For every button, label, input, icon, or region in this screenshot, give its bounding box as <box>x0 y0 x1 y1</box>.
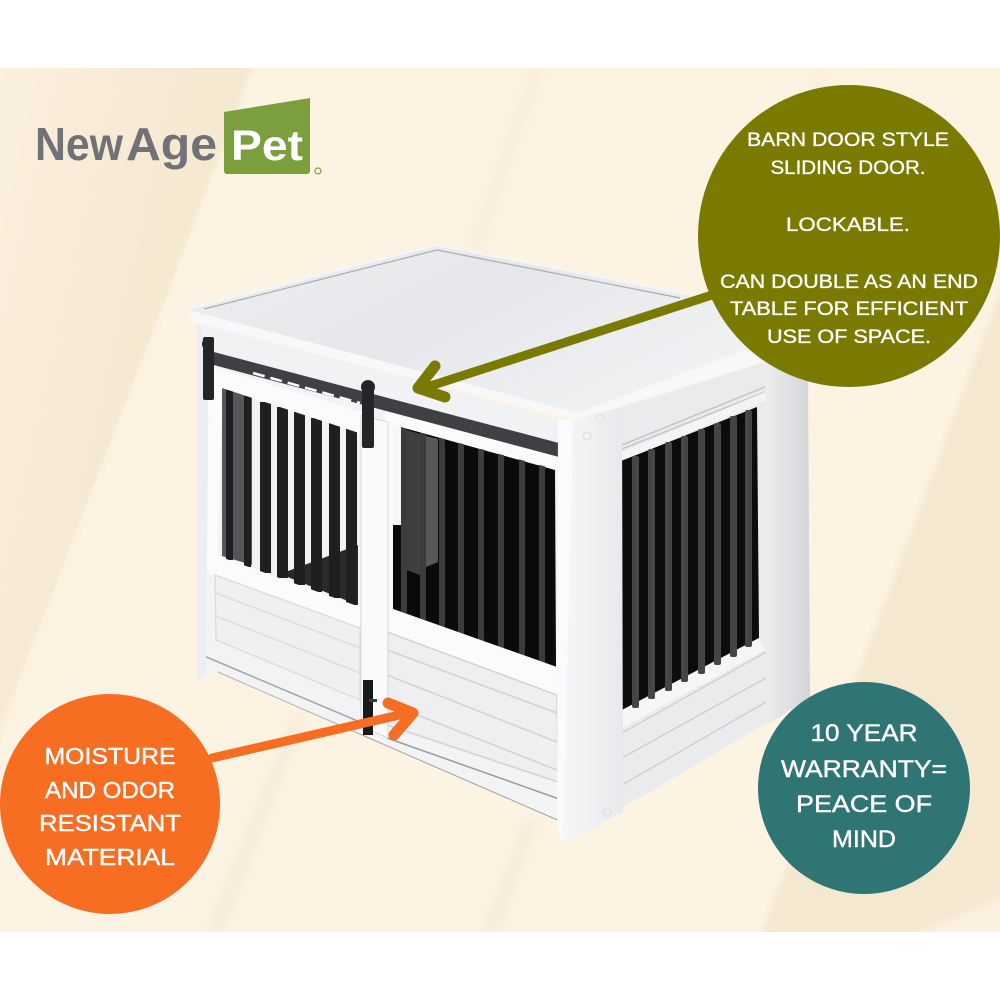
callout: barn door: LOCKABLE. <box>786 215 910 236</box>
top surface <box>188 246 755 413</box>
side lower panel grooves <box>622 652 766 785</box>
callout: moisture resistant: MOISTURE <box>44 743 176 769</box>
right lower panel <box>362 632 562 822</box>
right door mesh <box>393 427 556 668</box>
callout: barn door <box>698 85 1000 387</box>
logo: New Age Pet: New <box>35 118 123 170</box>
valance above rail <box>200 322 562 443</box>
sliding rail <box>210 351 559 457</box>
callout: barn door: BARN DOOR STYLE <box>747 130 949 151</box>
callout: warranty: 10 YEAR <box>810 720 918 747</box>
callout: barn door: CAN DOUBLE AS AN END <box>720 272 978 293</box>
back corner post <box>765 350 810 725</box>
callout: warranty: WARRANTY= <box>781 756 947 783</box>
left door frame <box>205 366 362 628</box>
callout: moisture resistant <box>0 694 220 914</box>
arrow: olive pointing to door <box>418 295 712 397</box>
callout: warranty <box>758 682 970 894</box>
callout: moisture resistant: AND ODOR <box>45 777 175 803</box>
door lock <box>363 680 377 735</box>
front corner post <box>563 407 623 843</box>
right door frame <box>385 408 558 695</box>
callout: barn door: USE OF SPACE. <box>767 327 931 348</box>
callout: barn door: SLIDING DOOR. <box>770 158 926 179</box>
callout: moisture resistant: MATERIAL <box>45 844 175 870</box>
crate left post and foot <box>197 322 209 682</box>
hanger right <box>361 380 375 448</box>
crate front face <box>197 322 562 822</box>
left lower panel <box>204 575 362 735</box>
callout: moisture resistant: RESISTANT <box>39 810 181 836</box>
callout: barn door: TABLE FOR EFFICIENT <box>730 299 968 320</box>
logo: New Age Pet <box>35 98 321 174</box>
left door mesh <box>218 387 358 605</box>
side panel <box>622 362 767 808</box>
logo: New Age Pet: Age <box>126 118 217 170</box>
hanger left <box>202 337 214 400</box>
callout: warranty: PEACE OF <box>796 791 932 818</box>
dog crate furniture <box>188 245 810 843</box>
callout: warranty: MIND <box>832 826 896 853</box>
logo: New Age Pet: Pet <box>231 122 303 170</box>
side mesh <box>621 407 765 728</box>
arrow: orange pointing to panel <box>212 703 413 758</box>
center stile <box>361 415 388 738</box>
